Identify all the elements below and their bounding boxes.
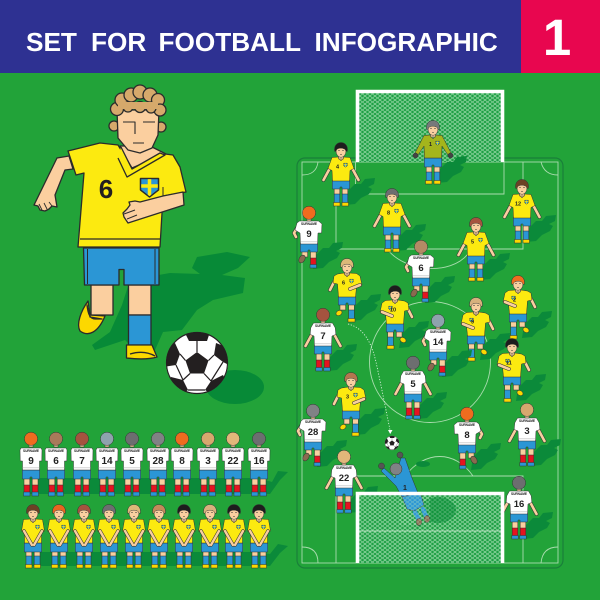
small football <box>384 435 400 451</box>
player 28: 28 <box>308 427 318 438</box>
player 2: 2 <box>513 298 516 304</box>
left hand fingers <box>39 202 52 210</box>
player 4 <box>324 142 375 206</box>
front boot <box>126 345 157 359</box>
shirt number 6: 6 <box>99 174 113 204</box>
player 8 <box>374 188 426 252</box>
shorts <box>84 248 159 285</box>
player 7 <box>306 308 357 371</box>
bottom goal frame <box>358 494 502 563</box>
football pitch <box>297 158 563 568</box>
white team players <box>294 206 561 539</box>
goalkeeper number 1 <box>413 120 467 184</box>
roster player 28: 28 <box>152 456 164 467</box>
pass trajectory arrow <box>348 324 392 434</box>
roster yellow player 6 <box>148 504 170 568</box>
left arm <box>34 156 73 211</box>
roster yellow player 2 <box>48 504 70 568</box>
player 5: 5 <box>471 240 474 246</box>
player 16: SURNAME <box>511 492 527 496</box>
player 16 <box>502 476 553 539</box>
large football <box>163 329 231 399</box>
roster player 8: SURNAME <box>174 449 190 453</box>
roster yellow player 7 <box>172 504 196 568</box>
player 5 <box>396 356 447 419</box>
player 16: 16 <box>514 499 524 510</box>
roster player 28 <box>147 432 169 496</box>
roster yellow player 4 <box>98 504 120 568</box>
number badge: 1 <box>543 9 571 66</box>
roster player 9: SURNAME <box>23 449 39 453</box>
player 14: SURNAME <box>430 330 446 334</box>
roster player 22 <box>222 432 244 496</box>
player 9: SURNAME <box>301 222 317 226</box>
roster player 3 <box>197 432 219 496</box>
roster player 7: SURNAME <box>74 449 90 453</box>
player 9 <box>461 298 510 361</box>
shirt hem <box>80 238 160 240</box>
number badge <box>521 0 600 73</box>
neck <box>120 146 166 170</box>
shirt <box>68 143 186 247</box>
goalkeeper number 1: 1 <box>429 142 432 148</box>
player 14: 14 <box>433 337 444 348</box>
legs <box>91 285 151 315</box>
roster player 3: SURNAME <box>200 449 216 453</box>
player 3 <box>510 403 561 466</box>
row shadow <box>27 471 288 494</box>
title banner <box>0 0 521 73</box>
shadow of large ball <box>206 370 264 404</box>
player 4: 4 <box>336 164 340 170</box>
player 3: SURNAME <box>519 419 535 423</box>
player 12: 12 <box>515 202 521 208</box>
crest <box>140 178 158 197</box>
player 7: 7 <box>320 331 326 342</box>
right arm <box>123 192 184 223</box>
player 6: 6 <box>418 263 424 274</box>
player 11: 11 <box>506 360 512 366</box>
goal area line <box>357 530 502 532</box>
roster player 16 <box>248 432 270 496</box>
facial features <box>123 122 155 143</box>
roster player 22: 22 <box>227 456 239 467</box>
roster player 14 <box>96 432 118 496</box>
title banner: INFOGRAPHIC <box>314 27 498 57</box>
player 6: 6 <box>342 280 345 286</box>
player 28 <box>298 404 347 467</box>
player 12 <box>504 180 556 243</box>
roster player 5 <box>121 432 143 496</box>
ball ground shadow <box>416 461 430 467</box>
player 22: SURNAME <box>336 466 352 470</box>
player 8 <box>454 407 501 470</box>
roster player 28: SURNAME <box>150 449 166 453</box>
player 28: SURNAME <box>305 420 321 424</box>
roster player 6 <box>45 432 67 496</box>
player 3 <box>334 372 385 436</box>
roster player 22: SURNAME <box>225 449 241 453</box>
player 14 <box>423 314 472 377</box>
collar <box>118 147 165 177</box>
roster yellow player 1 <box>22 504 44 568</box>
roster yellow player 3 <box>72 504 96 568</box>
player 9: 9 <box>471 320 474 326</box>
player 5 <box>458 218 510 281</box>
player 3: 3 <box>524 426 530 437</box>
roster player 16: 16 <box>253 456 265 467</box>
player 10 <box>380 286 429 349</box>
roster player 3: 3 <box>205 456 211 467</box>
roster: white team <box>20 432 288 496</box>
roster player 14: 14 <box>101 456 113 467</box>
player 3: 3 <box>346 394 349 400</box>
back hair <box>109 121 166 132</box>
title banner: SET <box>26 27 77 57</box>
player 9 <box>294 206 343 269</box>
diving goalkeeper: 1 <box>403 485 407 492</box>
goalkeeper shadow on net <box>420 497 456 523</box>
player 2 <box>503 276 552 339</box>
title banner: FOR <box>91 27 146 57</box>
player 6: SURNAME <box>413 256 429 260</box>
player 8: 8 <box>387 210 390 216</box>
shadow of large player <box>92 252 250 350</box>
title banner: FOOTBALL <box>158 27 301 57</box>
roster player 7: 7 <box>79 456 85 467</box>
roster yellow player 8 <box>198 504 222 568</box>
roster yellow player 10 <box>248 504 270 568</box>
face <box>117 110 159 153</box>
player 22: 22 <box>339 473 349 484</box>
roster player 6: 6 <box>53 456 59 467</box>
player 22 <box>326 450 378 513</box>
player 6 <box>406 240 455 303</box>
roster player 8: 8 <box>179 456 185 467</box>
roster player 5: 5 <box>129 456 135 467</box>
player 11 <box>497 338 546 402</box>
roster player 5: SURNAME <box>124 449 140 453</box>
roster yellow player 5 <box>122 504 146 568</box>
large player number 6 <box>34 85 186 359</box>
player 10: 10 <box>390 308 396 314</box>
back foot <box>79 301 105 334</box>
roster player 9 <box>20 432 42 496</box>
player 5: SURNAME <box>405 372 421 376</box>
roster player 8 <box>171 432 193 496</box>
roster player 6: SURNAME <box>48 449 64 453</box>
curly hair <box>110 85 166 116</box>
yellow team players <box>324 142 556 436</box>
sock <box>128 315 151 345</box>
player 9: 9 <box>306 229 312 240</box>
roster yellow player 9 <box>222 504 246 568</box>
player 7: SURNAME <box>315 324 331 328</box>
player 8: 8 <box>464 430 470 441</box>
player 8: SURNAME <box>459 423 475 427</box>
roster player 9: 9 <box>28 456 34 467</box>
top goal net <box>357 92 502 162</box>
roster player 16: SURNAME <box>251 449 267 453</box>
roster player 14: SURNAME <box>99 449 115 453</box>
roster player 7 <box>71 432 93 496</box>
net over goalkeeper legs <box>400 493 430 525</box>
top goal frame <box>358 92 502 162</box>
diving goalkeeper <box>378 452 430 526</box>
player 6 <box>330 258 381 322</box>
roster: yellow team <box>22 504 288 568</box>
row shadow <box>27 544 288 566</box>
bottom goal net <box>357 493 502 563</box>
player 5: 5 <box>410 379 416 390</box>
